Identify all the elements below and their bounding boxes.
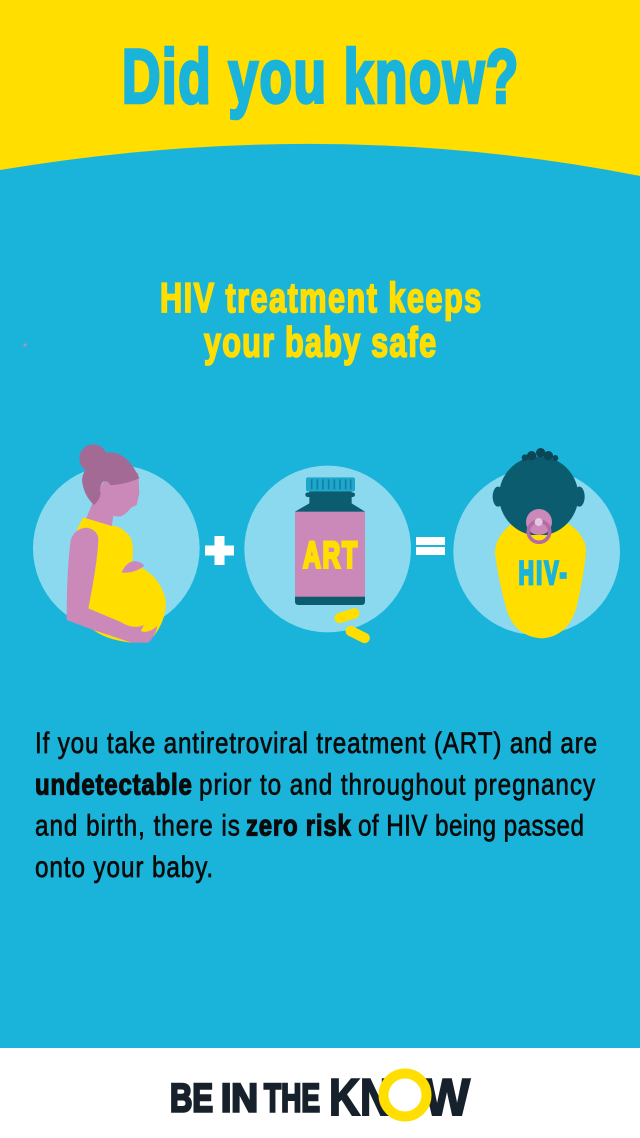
logo: Be in the Know: BE	[170, 1076, 213, 1120]
body text: of HIV being passed	[358, 808, 584, 842]
stray dot	[24, 344, 26, 346]
logo: Be in the Know: KN	[329, 1069, 391, 1127]
logo: Be in the Know: IN	[221, 1076, 258, 1120]
body text: If you take antiretroviral treatment (ART) and are	[35, 726, 597, 760]
body text: undetectable	[35, 767, 192, 801]
footer band	[0, 1048, 640, 1138]
body text: and birth, there is	[35, 808, 240, 842]
body text	[35, 726, 597, 884]
header banner	[0, 0, 640, 176]
body text: zero risk	[246, 808, 352, 842]
logo: Be in the Know: W	[424, 1069, 471, 1127]
title: Did you know?	[122, 34, 518, 119]
subtitle: your baby safe	[204, 319, 436, 366]
body text: prior to and throughout pregnancy	[199, 767, 595, 801]
body text: onto your baby.	[35, 850, 213, 884]
icon: baby: HIV-	[519, 554, 567, 591]
icon: baby	[453, 448, 620, 638]
icon: plus	[205, 536, 234, 565]
icon: pregnant woman	[33, 444, 200, 643]
icon: ART bottle: ART	[303, 533, 357, 576]
logo: Be in the Know: THE	[264, 1076, 320, 1120]
subtitle: HIV treatment keeps	[160, 274, 481, 321]
subtitle	[160, 274, 481, 366]
icon: ART bottle	[244, 466, 411, 638]
icon: equals	[416, 537, 445, 555]
logo: Be in the Know	[170, 1069, 471, 1127]
